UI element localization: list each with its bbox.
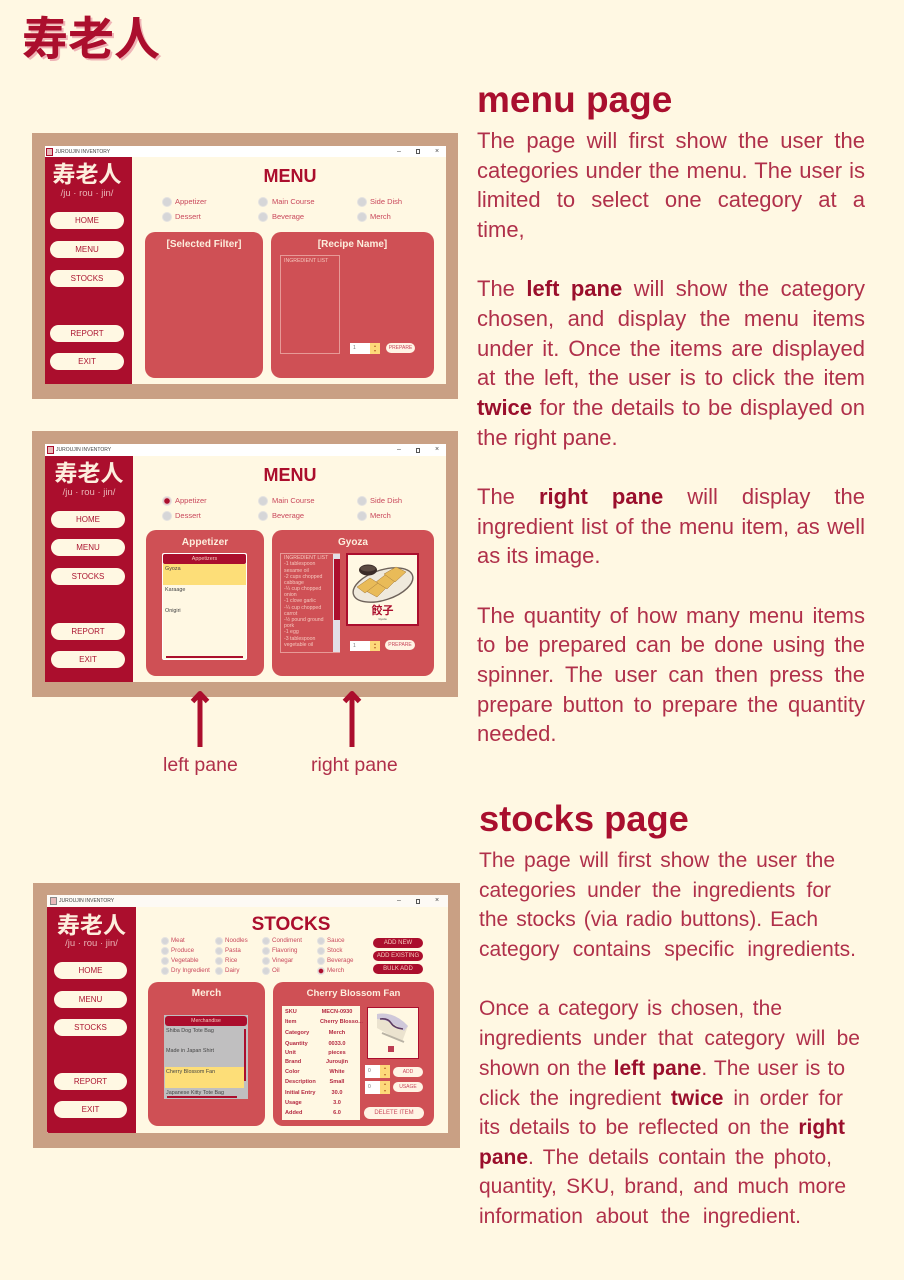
radio buttons: stock categories: Sauce xyxy=(327,937,345,944)
add button xyxy=(393,1067,423,1077)
radio buttons: stock categories: Beverage xyxy=(327,957,354,964)
text block: menu page description: needed. xyxy=(477,721,557,746)
button: add existing: ADD EXISTING xyxy=(377,953,419,959)
ingredient list xyxy=(280,553,340,653)
panel: left pane empty: [Selected Filter] xyxy=(166,239,242,250)
ingredient list: pork xyxy=(284,623,294,629)
text block: stocks page description: click the ingredient twice in order for xyxy=(479,1087,843,1110)
panel: left pane Appetizer xyxy=(146,530,264,676)
heading: MENU: MENU xyxy=(264,166,316,186)
delete item button xyxy=(364,1107,424,1119)
radio buttons: stock categories: Stock xyxy=(327,947,342,954)
radio buttons: stock categories: Produce xyxy=(171,947,194,954)
merchandise list: Made in Japan Shirt xyxy=(166,1048,214,1054)
panel: right pane empty: [Recipe Name] xyxy=(318,239,387,250)
item details table: Description xyxy=(285,1079,316,1085)
sidebar: MENU xyxy=(76,543,100,552)
item details table: Category xyxy=(285,1030,309,1036)
arrow: left pane xyxy=(190,691,210,747)
radio buttons: stock categories: Pasta xyxy=(225,947,241,954)
label: left pane: left pane xyxy=(163,754,238,776)
ingredient list: -3 tablespoon xyxy=(284,636,315,642)
ingredient list: -¼ cup chopped xyxy=(284,586,321,592)
item details table: Added xyxy=(285,1110,302,1116)
heading: menu page: menu page xyxy=(477,79,672,120)
text block: menu page description: The left pane will show the category xyxy=(477,276,865,301)
sidebar: MENU xyxy=(75,245,99,254)
sidebar: EXIT xyxy=(82,1105,99,1114)
sidebar: /ju · rou · jin/ xyxy=(65,938,118,949)
button: bulk add xyxy=(373,964,423,974)
window title bar: × xyxy=(435,897,439,904)
image: gyoza xyxy=(346,553,419,626)
item details table: Juroujin xyxy=(326,1059,348,1065)
panel: right pane Cherry Blossom Fan xyxy=(273,982,434,1126)
window title bar xyxy=(47,895,448,907)
radio buttons: menu categories with Appetizer selected xyxy=(162,496,402,521)
image: gyoza: 餃子 xyxy=(372,605,394,617)
sidebar: 寿老人 xyxy=(57,912,126,938)
sidebar xyxy=(45,456,133,682)
item details table: White xyxy=(329,1069,345,1075)
radio buttons: stock categories: Vegetable xyxy=(171,957,199,964)
window title bar: JUROUJIN INVENTORY xyxy=(59,898,114,904)
text block: menu page description: limited to select one category at a xyxy=(477,187,865,212)
add button: ADD xyxy=(403,1069,413,1075)
text block: stocks page description: the stocks (via radio buttons). Each xyxy=(479,908,818,931)
panel: left pane Merch xyxy=(148,982,265,1126)
text block: menu page description: the right pane. xyxy=(477,425,618,450)
usage button xyxy=(393,1082,423,1092)
screenshot: menu page with selected item xyxy=(32,431,458,697)
radio buttons: menu categories with Appetizer selected: Appetizer xyxy=(175,496,207,505)
ingredient list: -½ pound ground xyxy=(284,617,324,623)
text block: menu page description: as its image. xyxy=(477,543,600,568)
sidebar: STOCKS xyxy=(72,572,104,581)
sidebar: 寿老人 xyxy=(54,460,124,486)
panel: left pane Merch: Merch xyxy=(192,988,221,999)
ingredient list: -1 tablespoon xyxy=(284,561,315,567)
sidebar: HOME xyxy=(78,966,102,975)
appetizer list: Karaage xyxy=(165,587,185,593)
item details table: Initial Entry xyxy=(285,1090,315,1096)
item details table: Quantity xyxy=(285,1041,308,1047)
quantity spinner xyxy=(350,343,380,354)
quantity spinner: 1 xyxy=(353,643,356,649)
item details table: Usage xyxy=(285,1100,302,1106)
ingredient list: INGREDIENT LIST xyxy=(284,555,328,561)
ingredient list box: INGREDIENT LIST xyxy=(284,258,328,264)
radio buttons: stock categories: Meat xyxy=(171,937,185,944)
radio buttons: stock categories: Condiment xyxy=(272,937,302,944)
radio buttons: stock categories xyxy=(161,937,354,975)
heading: stocks page: stocks page xyxy=(479,798,689,839)
prepare button xyxy=(385,640,415,650)
screenshot: empty menu page xyxy=(32,133,458,399)
radio buttons: stock categories: Flavoring xyxy=(272,947,297,954)
title: 寿老人 xyxy=(22,13,160,65)
ingredient list: -1 clove garlic xyxy=(284,598,316,604)
item details table: Merch xyxy=(329,1030,345,1036)
merchandise list: Cherry Blossom Fan xyxy=(166,1069,215,1075)
sidebar xyxy=(45,157,132,384)
text block: menu page description xyxy=(477,128,865,746)
appetizer list: Onigiri xyxy=(165,608,181,614)
item details table: Unit xyxy=(285,1050,296,1056)
label: right pane: right pane xyxy=(311,754,398,776)
text block: stocks page description: pane. The details contain the photo, xyxy=(479,1146,832,1169)
delete item button: DELETE ITEM xyxy=(374,1110,414,1116)
image: cherry blossom fan xyxy=(367,1007,419,1059)
item details table: Small xyxy=(330,1079,344,1085)
ingredient list: sesame oil xyxy=(284,568,309,574)
radio buttons: menu categories: Side Dish xyxy=(370,197,402,206)
sidebar xyxy=(47,907,136,1133)
radio buttons: menu categories with Appetizer selected: Merch xyxy=(370,511,391,520)
appetizer list: Appetizers xyxy=(192,556,217,562)
sidebar: STOCKS xyxy=(71,274,103,283)
item details table: Brand xyxy=(285,1059,301,1065)
text block: menu page description: to be prepared can be done using the xyxy=(477,632,865,657)
add quantity spinner: 0 xyxy=(368,1068,371,1074)
text block: menu page description: at the left, the user is to click the item xyxy=(477,365,865,390)
text block: stocks page description: quantity, SKU, brand, and much more xyxy=(479,1175,846,1198)
text block: stocks page description: Once a category is chosen, the xyxy=(479,997,782,1020)
panel: left pane Appetizer: Appetizer xyxy=(182,537,228,548)
radio buttons: menu categories: Dessert xyxy=(175,212,201,221)
item details table: 0033.0 xyxy=(328,1041,346,1047)
radio buttons: menu categories with Appetizer selected: Main Course xyxy=(272,496,315,505)
radio buttons: stock categories: Dairy xyxy=(225,967,239,974)
text block: menu page description: spinner. The user can then press the xyxy=(477,662,865,687)
sidebar: EXIT xyxy=(78,357,96,366)
heading: MENU: MENU xyxy=(264,465,316,485)
text block: menu page description: prepare button to prepare the quantity xyxy=(477,692,865,717)
merchandise list: Shiba Dog Tote Bag xyxy=(166,1028,214,1034)
sidebar: STOCKS xyxy=(74,1023,107,1032)
text block: menu page description: twice for the details to be displayed on xyxy=(477,395,865,420)
window title bar xyxy=(45,146,446,157)
text block: menu page description: ingredient list of the menu item, as well xyxy=(477,514,865,539)
item details table xyxy=(282,1006,360,1120)
sidebar: REPORT xyxy=(71,627,105,636)
merchandise list: Merchandise xyxy=(191,1018,221,1024)
button: add existing xyxy=(373,951,423,961)
sidebar: REPORT xyxy=(70,329,104,338)
window title bar: JUROUJIN INVENTORY xyxy=(56,447,111,453)
ingredient list box xyxy=(280,255,340,354)
ingredient list: -2 cups chopped xyxy=(284,574,322,580)
sidebar: MENU xyxy=(79,995,102,1004)
add quantity spinner xyxy=(365,1065,390,1078)
text block: menu page description: The quantity of how many menu items xyxy=(477,603,865,628)
radio buttons: stock categories: Dry Ingredient xyxy=(171,967,210,974)
window title bar: × xyxy=(435,148,439,154)
button: add new xyxy=(373,938,423,948)
sidebar: /ju · rou · jin/ xyxy=(61,188,113,199)
radio buttons: menu categories xyxy=(162,197,402,222)
screenshot: stocks page xyxy=(33,883,460,1148)
usage quantity spinner xyxy=(365,1081,390,1094)
panel: right pane Gyoza: Gyoza xyxy=(338,537,368,548)
button: bulk add: BULK ADD xyxy=(383,966,413,972)
panel: left pane empty xyxy=(145,232,263,378)
radio buttons: menu categories with Appetizer selected: Side Dish xyxy=(370,496,402,505)
merchandise list: Japanese Kitty Tote Bag xyxy=(166,1090,224,1096)
text block: stocks page description xyxy=(479,849,860,1228)
radio buttons: stock categories: Vinegar xyxy=(272,957,293,964)
window title bar: – xyxy=(397,897,401,904)
ingredient list: cabbage xyxy=(284,580,304,586)
window title bar xyxy=(45,444,446,456)
text block: stocks page description: information about the ingredient. xyxy=(479,1205,801,1228)
arrow: right pane xyxy=(342,691,362,747)
sidebar: HOME xyxy=(75,216,99,225)
item details table: 30.0 xyxy=(332,1090,342,1096)
text block: menu page description: categories under the menu. The user is xyxy=(477,158,865,183)
ingredient list: vegetable oil xyxy=(284,642,313,648)
radio buttons: menu categories: Appetizer xyxy=(175,197,207,206)
radio buttons: stock categories: Noodles xyxy=(225,937,248,944)
text block: menu page description: The right pane will display the xyxy=(477,484,865,509)
text block: stocks page description: The page will first show the user the xyxy=(479,849,835,872)
radio buttons: menu categories: Merch xyxy=(370,212,391,221)
sidebar: 寿老人 xyxy=(52,161,122,187)
sidebar: HOME xyxy=(76,515,100,524)
radio buttons: stock categories: Merch xyxy=(327,967,344,974)
item details table: Cherry Blosso... xyxy=(320,1019,363,1025)
prepare button xyxy=(386,343,415,353)
quantity spinner: 1 xyxy=(353,345,356,351)
ingredient list: -1 egg xyxy=(284,629,299,635)
quantity spinner xyxy=(350,641,380,651)
prepare button: PREPARE xyxy=(388,642,412,648)
panel: right pane empty xyxy=(271,232,434,378)
usage quantity spinner: 0 xyxy=(368,1084,371,1090)
radio buttons: menu categories with Appetizer selected: Dessert xyxy=(175,511,201,520)
item details table: pieces xyxy=(328,1050,346,1056)
sidebar: /ju · rou · jin/ xyxy=(63,487,115,498)
window title bar: JUROUJIN INVENTORY xyxy=(55,148,110,154)
ingredient list: -¼ cup chopped xyxy=(284,604,321,610)
item details table: SKU xyxy=(285,1009,297,1015)
image: gyoza: Gyoza xyxy=(378,617,387,621)
radio buttons: stock categories: Oil xyxy=(272,967,280,974)
text block: stocks page description: its details to be reflected on the right xyxy=(479,1116,845,1139)
text block: menu page description: time, xyxy=(477,217,525,242)
text block: menu page description: chosen, and display the menu items xyxy=(477,306,865,331)
window title bar: × xyxy=(435,446,439,453)
radio buttons: menu categories: Beverage xyxy=(272,212,304,221)
text block: menu page description: under it. Once the items are displayed xyxy=(477,336,865,361)
appetizer list: Gyoza xyxy=(165,566,181,572)
radio buttons: menu categories with Appetizer selected: Beverage xyxy=(272,511,304,520)
window title bar: – xyxy=(397,446,401,453)
text block: stocks page description: ingredients under that category will be xyxy=(479,1027,860,1050)
sidebar: REPORT xyxy=(74,1077,107,1086)
button: add new: ADD NEW xyxy=(384,940,412,946)
radio buttons: menu categories: Main Course xyxy=(272,197,315,206)
text block: stocks page description: shown on the left pane. The user is to xyxy=(479,1057,845,1080)
item details table: Item xyxy=(285,1019,297,1025)
sidebar: EXIT xyxy=(79,655,97,664)
ingredient list: carrot xyxy=(284,610,297,616)
panel: right pane Gyoza xyxy=(272,530,434,676)
window title bar: – xyxy=(397,148,401,154)
item details table: MECN-0930 xyxy=(322,1009,352,1015)
usage button: USAGE xyxy=(399,1084,417,1090)
text block: stocks page description: category contains specific ingredients. xyxy=(479,938,856,961)
merchandise list xyxy=(164,1015,248,1099)
text block: menu page description: The page will first show the user the xyxy=(477,128,865,153)
item details table: Color xyxy=(285,1069,300,1075)
prepare button: PREPARE xyxy=(389,345,412,351)
ingredient list: onion xyxy=(284,592,297,598)
panel: right pane Cherry Blossom Fan: Cherry Blossom Fan xyxy=(307,988,400,999)
item details table: 3.0 xyxy=(333,1100,341,1106)
item details table: 6.0 xyxy=(333,1110,341,1116)
text block: stocks page description: categories under the ingredients for xyxy=(479,879,831,902)
heading: STOCKS: STOCKS xyxy=(252,914,330,935)
radio buttons: stock categories: Rice xyxy=(225,957,237,964)
appetizer list xyxy=(162,553,247,660)
